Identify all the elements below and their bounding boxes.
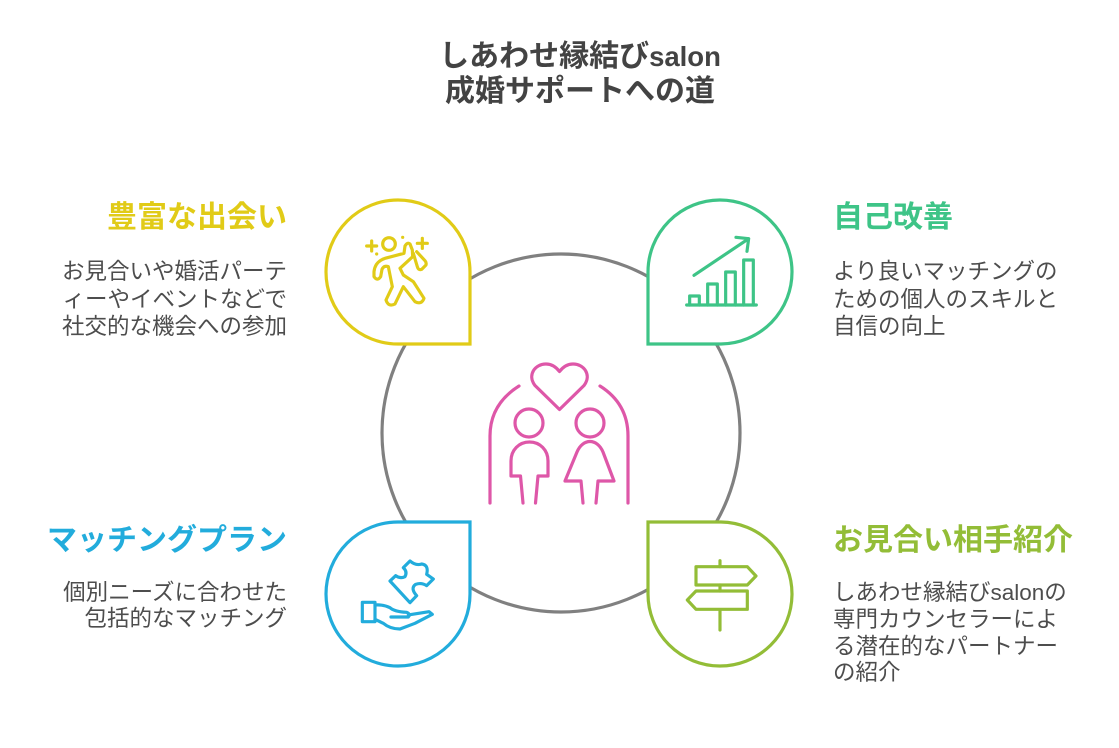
text block: 自己改善: 自信の向上	[833, 314, 946, 339]
icon: hand holding puzzle piece	[362, 561, 433, 629]
text block: マッチングプラン	[47, 524, 287, 631]
text block: 豊富な出会い	[62, 201, 287, 339]
text block: 豊富な出会い: 社交的な機会への参加	[62, 314, 287, 339]
text block: 自己改善: より良いマッチングの	[833, 259, 1058, 284]
text block: 豊富な出会い: 豊富な出会い	[107, 201, 287, 234]
central ring	[382, 254, 740, 612]
text block: お見合い相手紹介	[833, 524, 1073, 685]
icon: rising bar chart	[687, 237, 756, 305]
icon: couple under arch with heart	[490, 364, 628, 503]
text block: お見合い相手紹介: る潜在的なパートナー	[833, 634, 1058, 659]
text block: マッチングプラン: 包括的なマッチング	[84, 606, 287, 631]
text block: お見合い相手紹介: しあわせ縁結びsalonの	[833, 580, 1067, 605]
panel: lime drop	[648, 522, 792, 666]
title	[439, 40, 721, 108]
icon: signpost	[687, 561, 756, 630]
text block: 自己改善: 自己改善	[833, 201, 953, 234]
title: しあわせ縁結びsalon	[439, 40, 721, 73]
text block: 自己改善: ための個人のスキルと	[833, 287, 1058, 312]
text block: 豊富な出会い: ィーやイベントなどで	[62, 287, 287, 312]
text block: マッチングプラン: マッチングプラン	[47, 524, 287, 557]
text block: お見合い相手紹介: 専門カウンセラーによ	[833, 607, 1058, 632]
text block: お見合い相手紹介: の紹介	[833, 660, 901, 685]
text block: 豊富な出会い: お見合いや婚活パーテ	[62, 259, 287, 284]
panel: yellow drop	[326, 200, 470, 344]
text block: 自己改善	[833, 201, 1058, 339]
panel: blue drop	[326, 522, 470, 666]
text block: マッチングプラン: 個別ニーズに合わせた	[63, 580, 287, 605]
text block: お見合い相手紹介: お見合い相手紹介	[833, 524, 1073, 557]
panel: green drop	[648, 200, 792, 344]
title: 成婚サポートへの道	[445, 75, 715, 108]
icon: person with sparkles	[367, 237, 427, 305]
